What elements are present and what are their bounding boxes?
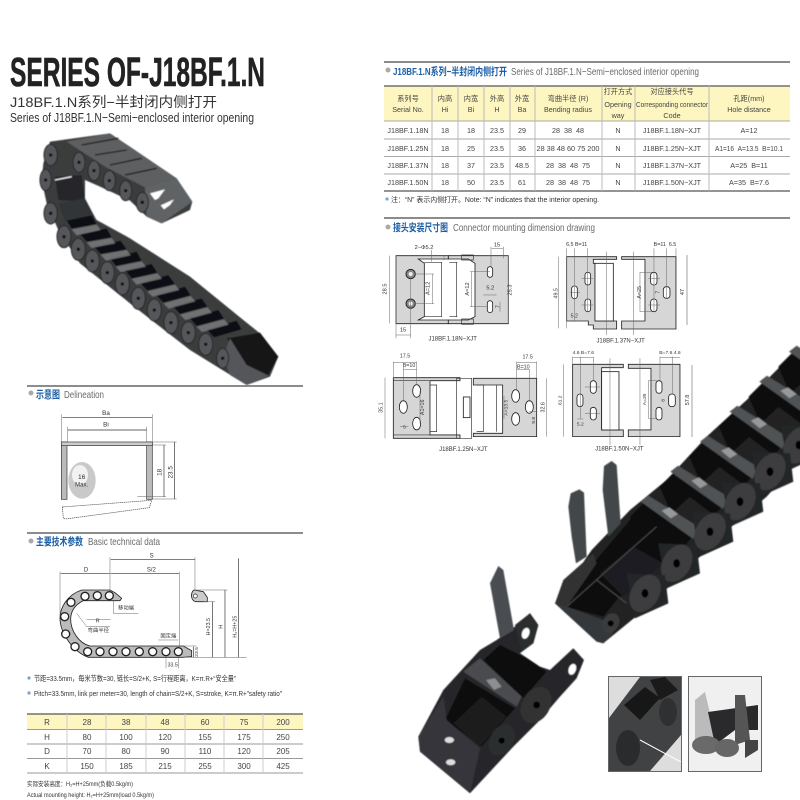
drawing: J18BF.1.18N-XJT: J18BF.1.18N−XJT — [428, 336, 477, 342]
drawing: J18BF.1.18N-XJT: 2−Φ5.2 — [415, 245, 433, 251]
specification table: Bending radius — [544, 105, 592, 114]
cross-section diagram: 16 — [78, 474, 86, 481]
drawing: J18BF.1.18N-XJT: 28.5 — [383, 283, 389, 295]
table: R H D K values: D — [44, 747, 50, 756]
table: R H D K values: 185 — [119, 762, 133, 771]
drawing: J18BF.1.18N-XJT: A=12 — [425, 282, 431, 295]
specification table: A=35 B=7.6 — [729, 178, 769, 187]
drawing: J18BF.1.18N-XJT — [383, 242, 513, 342]
drawing: J18BF.1.50N-XJT — [558, 350, 681, 453]
heading: specification: Series of J18BF.1.N−Semi−enclosed interior opening — [511, 66, 699, 78]
table: R H D K values: 120 — [237, 747, 251, 756]
drawing: J18BF.1.18N-XJT: A=12 — [465, 282, 471, 296]
specification table: 37 — [467, 161, 475, 170]
table: R H D K values: 60 — [201, 718, 210, 727]
chain travel diagram: S/2 — [147, 567, 156, 573]
table: R H D K values: 110 — [199, 747, 212, 756]
drawing: J18BF.1.25N-XJT: 35.1 — [379, 402, 385, 413]
chain travel diagram — [60, 553, 247, 669]
specification table: Corresponding connector — [636, 100, 709, 109]
table: R H D K values: K — [44, 762, 50, 771]
specification table: 外宽 — [515, 94, 529, 103]
specification table: 18 — [441, 178, 449, 187]
title: SERIES OF-J18BF.1.N — [10, 49, 265, 95]
drawing: J18BF.1.18N-XJT: 15 — [400, 327, 406, 333]
drawing: J18BF.1.37N-XJT: B=11 6.5 — [654, 242, 676, 248]
specification table — [384, 86, 790, 191]
specification table: 打开方式 — [604, 87, 632, 96]
cross-section diagram: Max. — [75, 482, 88, 488]
specification table: N — [615, 144, 621, 153]
specification table: 弯曲半径 (R) — [548, 94, 588, 103]
dimension: 57.8: 57.8 — [685, 395, 691, 405]
drawing: J18BF.1.18N-XJT: 7 — [495, 305, 501, 308]
specification table: Ba — [518, 105, 526, 114]
heading: basic technical data: 主要技术参数 — [36, 535, 83, 548]
table: R H D K values: 38 — [122, 718, 131, 727]
specification table: 18 — [441, 126, 449, 135]
specification table: J18BF.1.25N−XJT — [643, 144, 702, 153]
inset photo: opening tabs — [688, 676, 762, 772]
drawing: J18BF.1.25N-XJT: B=10 — [403, 363, 415, 369]
drawing: J18BF.1.37N-XJT: 7 — [655, 291, 661, 294]
specification table: 23.5 — [490, 126, 504, 135]
specification table: N — [615, 178, 621, 187]
note: pitch Chinese: 节距=33.5mm，每米节数=30, 链长=S/2+K, S=行程距离，K=π.R+“安全量” — [34, 673, 236, 683]
panel: connector mounting drawings — [379, 218, 790, 453]
specification table: 48.5 — [515, 161, 529, 170]
dimension: 47: 47 — [680, 289, 686, 295]
heading: delineation — [36, 388, 104, 401]
heading: connector mounting — [393, 221, 595, 234]
heading: delineation: 示意图 — [36, 388, 60, 401]
chain travel diagram: 23.5 — [194, 647, 200, 657]
cross-section diagram: 18 — [157, 468, 164, 476]
drawing: J18BF.1.18N-XJT: 15 — [494, 242, 500, 248]
specification table: 28 38 48 — [552, 126, 584, 135]
table: R H D K values: 90 — [161, 747, 170, 756]
table: R H D K values: 75 — [240, 718, 249, 727]
drawing: J18BF.1.37N-XJT: 5.2 — [571, 314, 578, 320]
specification table: 内高 — [438, 94, 452, 103]
table note: 注：“N” 表示内侧打开。Note: “N” indicates that the interior opening. — [391, 195, 599, 204]
table: R H D K values: 80 — [122, 747, 131, 756]
icon: heading bullet — [28, 390, 34, 396]
specification table: J18BF.1.25N — [387, 144, 429, 153]
heading: delineation: Delineation — [64, 389, 104, 401]
table: R H D K values: 28 — [83, 718, 92, 727]
inset photo: cable in chain — [608, 676, 682, 772]
specification table: 28 38 48 75 — [546, 178, 590, 187]
specification table: 29 — [518, 126, 526, 135]
drawing: J18BF.1.37N-XJT: 49.5 — [553, 288, 559, 299]
drawing: J18BF.1.50N-XJT: 8 — [660, 399, 666, 402]
specification table: J18BF.1.18N−XJT — [643, 126, 702, 135]
specification table: A=12 — [740, 126, 758, 135]
icon: heading bullet — [386, 224, 390, 230]
drawing: J18BF.1.25N-XJT: A1=16 — [420, 400, 426, 415]
cross-section diagram — [61, 410, 177, 519]
specification table: 50 — [467, 178, 475, 187]
specification table: J18BF.1.50N — [387, 178, 429, 187]
cross-section diagram: Bi — [103, 421, 109, 428]
icon: heading bullet — [386, 68, 390, 72]
specification table: 18 — [467, 126, 475, 135]
heading: specification — [393, 65, 699, 78]
table: R H D K values: 80 — [83, 733, 92, 742]
icon: heading bullet — [28, 538, 34, 544]
drawing: J18BF.1.25N-XJT: 9.8 — [531, 417, 537, 424]
specification table: 23.5 — [490, 144, 504, 153]
note: pitch English: Pitch=33.5mm, link per meter=30, length of chain=S/2+K, S=stroke, K=π.R+"safety ratio" — [34, 689, 282, 698]
drawing: J18BF.1.25N-XJT: B=10 — [517, 364, 530, 370]
table: R H D K values: 100 — [119, 733, 133, 742]
heading: connector mounting: 接头安装尺寸图 — [393, 221, 448, 234]
table: R H D K values: H — [44, 733, 50, 742]
drawing: J18BF.1.25N-XJT: A=13.5 — [504, 399, 510, 416]
specification table: way — [611, 111, 625, 120]
drawing: J18BF.1.25N-XJT: 32.6 — [540, 402, 546, 413]
specification table: Opening — [604, 100, 632, 109]
note: mounting height English: Actual mounting height: H₂=H+25mm(load 0.5kg/m) — [27, 792, 154, 799]
drawing: J18BF.1.50N-XJT: 4.6 B=7.6 — [573, 350, 594, 356]
table: R H D K values: 425 — [276, 762, 290, 771]
specification table: Code — [663, 111, 681, 120]
panel: delineation — [27, 386, 303, 519]
table: R H D K values: 150 — [80, 762, 94, 771]
chain travel diagram: 固定端 — [160, 631, 177, 639]
drawing: J18BF.1.37N-XJT — [553, 242, 676, 345]
drawing: J18BF.1.25N-XJT: 17.5 — [522, 355, 533, 361]
table: R H D K values: 300 — [237, 762, 251, 771]
specification table: H — [494, 105, 500, 114]
specification table: 36 — [518, 144, 526, 153]
table: R H D K values: 70 — [83, 747, 92, 756]
chain travel diagram: 移动端 — [118, 603, 135, 611]
drawing: J18BF.1.25N-XJT: 17.5 — [400, 354, 410, 360]
specification table: 孔距(mm) — [733, 94, 765, 103]
specification table: 对应接头代号 — [650, 87, 694, 96]
specification table: Serial No. — [392, 105, 424, 114]
tab 2 — [603, 461, 621, 537]
specification table: Hole distance — [727, 105, 771, 114]
chain travel diagram: S — [150, 553, 154, 559]
note: mounting height Chinese: 实际安装高度：H₂=H+25mm(负载0.5kg/m) — [27, 779, 133, 788]
specification table: 28 38 48 75 — [546, 161, 590, 170]
panel: series specification — [384, 62, 790, 204]
chain travel diagram: H₂=H+25 — [233, 616, 239, 638]
specification table: N — [615, 126, 621, 135]
photo: curved drag chain — [40, 133, 278, 385]
specification table: Bi — [468, 105, 475, 114]
table: R H D K values: R — [44, 718, 50, 727]
specification table: A1=16 A=13.5 B=10.1 — [715, 144, 783, 153]
heading: basic technical data — [36, 535, 160, 548]
table: R H D K values: 200 — [276, 718, 290, 727]
table: R H D K values — [27, 714, 303, 773]
cross-section diagram: Ba — [102, 410, 110, 417]
specification table: J18BF.1.50N−XJT — [643, 178, 702, 187]
table: R H D K values: 250 — [276, 733, 290, 742]
photo: chain end piece — [418, 566, 584, 793]
drawing: J18BF.1.50N-XJT: B=7.6 4.6 — [659, 350, 681, 356]
specification table: J18BF.1.18N — [387, 126, 429, 135]
table: R H D K values: 120 — [158, 733, 172, 742]
panel: basic technical data — [27, 533, 303, 698]
chain travel diagram: H=23.5 — [206, 618, 212, 635]
dimension: 57.8 — [685, 365, 692, 437]
specification table: J18BF.1.37N−XJT — [643, 161, 702, 170]
heading: connector mounting: Connector mounting dimension drawing — [453, 222, 595, 234]
heading: specification: J18BF.1.N系列−半封闭内侧打开 — [393, 65, 507, 78]
drawing: J18BF.1.50N-XJT: A=35 — [642, 393, 648, 405]
specification table: N — [615, 161, 621, 170]
drawing: J18BF.1.50N-XJT: J18BF.1.50N−XJT — [595, 447, 644, 453]
specification table: 外高 — [490, 94, 504, 103]
specification table: 61 — [518, 178, 526, 187]
table: R H D K values: 255 — [198, 762, 212, 771]
drawing: J18BF.1.18N-XJT: 25.3 — [507, 284, 513, 296]
chain travel diagram: 弯曲半径 — [88, 626, 110, 634]
specification table: 18 — [441, 144, 449, 153]
drawing: J18BF.1.37N-XJT: A=25 — [637, 286, 643, 299]
specification table: A=25 B=11 — [730, 161, 768, 170]
subtitle: Chinese: J18BF.1.N系列−半封闭内侧打开 — [10, 94, 217, 110]
specification table: J18BF.1.37N — [387, 161, 429, 170]
cross-section diagram: 23.5 — [167, 466, 174, 478]
drawing: J18BF.1.18N-XJT: 5.2 — [486, 286, 494, 292]
drawing: J18BF.1.25N-XJT: J18BF.1.25N−XJT — [439, 447, 488, 453]
chain travel diagram: D — [84, 567, 89, 573]
chain travel diagram: H — [218, 625, 224, 629]
photo: straight chain section with opened tabs — [555, 346, 800, 643]
specification table: 28 38 48 60 75 200 — [536, 144, 600, 153]
specification table: Hi — [442, 105, 449, 114]
table: R H D K values: 48 — [161, 718, 170, 727]
specification table: 25 — [467, 144, 475, 153]
dimension: 47 — [680, 255, 687, 325]
chain travel diagram: R — [96, 619, 100, 625]
specification table: 23.5 — [490, 161, 504, 170]
table: R H D K values: 215 — [158, 762, 172, 771]
heading: basic technical data: Basic technical data — [88, 536, 160, 548]
table: R H D K values: 205 — [276, 747, 290, 756]
subtitle: English: Series of J18BF.1.N−Semi−enclosed interior opening — [10, 110, 254, 125]
drawing: J18BF.1.37N-XJT: J18BF.1.37N−XJT — [596, 339, 645, 345]
drawing: J18BF.1.50N-XJT: 5.2 — [577, 422, 584, 428]
drawing: J18BF.1.25N-XJT — [379, 354, 547, 453]
specification table: 内宽 — [464, 94, 478, 103]
table: R H D K values: 175 — [237, 733, 251, 742]
tab 1 — [568, 489, 587, 563]
specification table: 18 — [441, 161, 449, 170]
drawing: J18BF.1.25N-XJT: 5 — [403, 424, 406, 430]
chain travel diagram: 33.5 — [167, 663, 178, 669]
table: R H D K values: 155 — [198, 733, 212, 742]
drawing: J18BF.1.50N-XJT: 61.2 — [558, 395, 564, 405]
specification table: 23.5 — [490, 178, 504, 187]
drawing: J18BF.1.37N-XJT: 6.5 B=11 — [566, 242, 587, 248]
specification table: 系列号 — [397, 94, 419, 103]
